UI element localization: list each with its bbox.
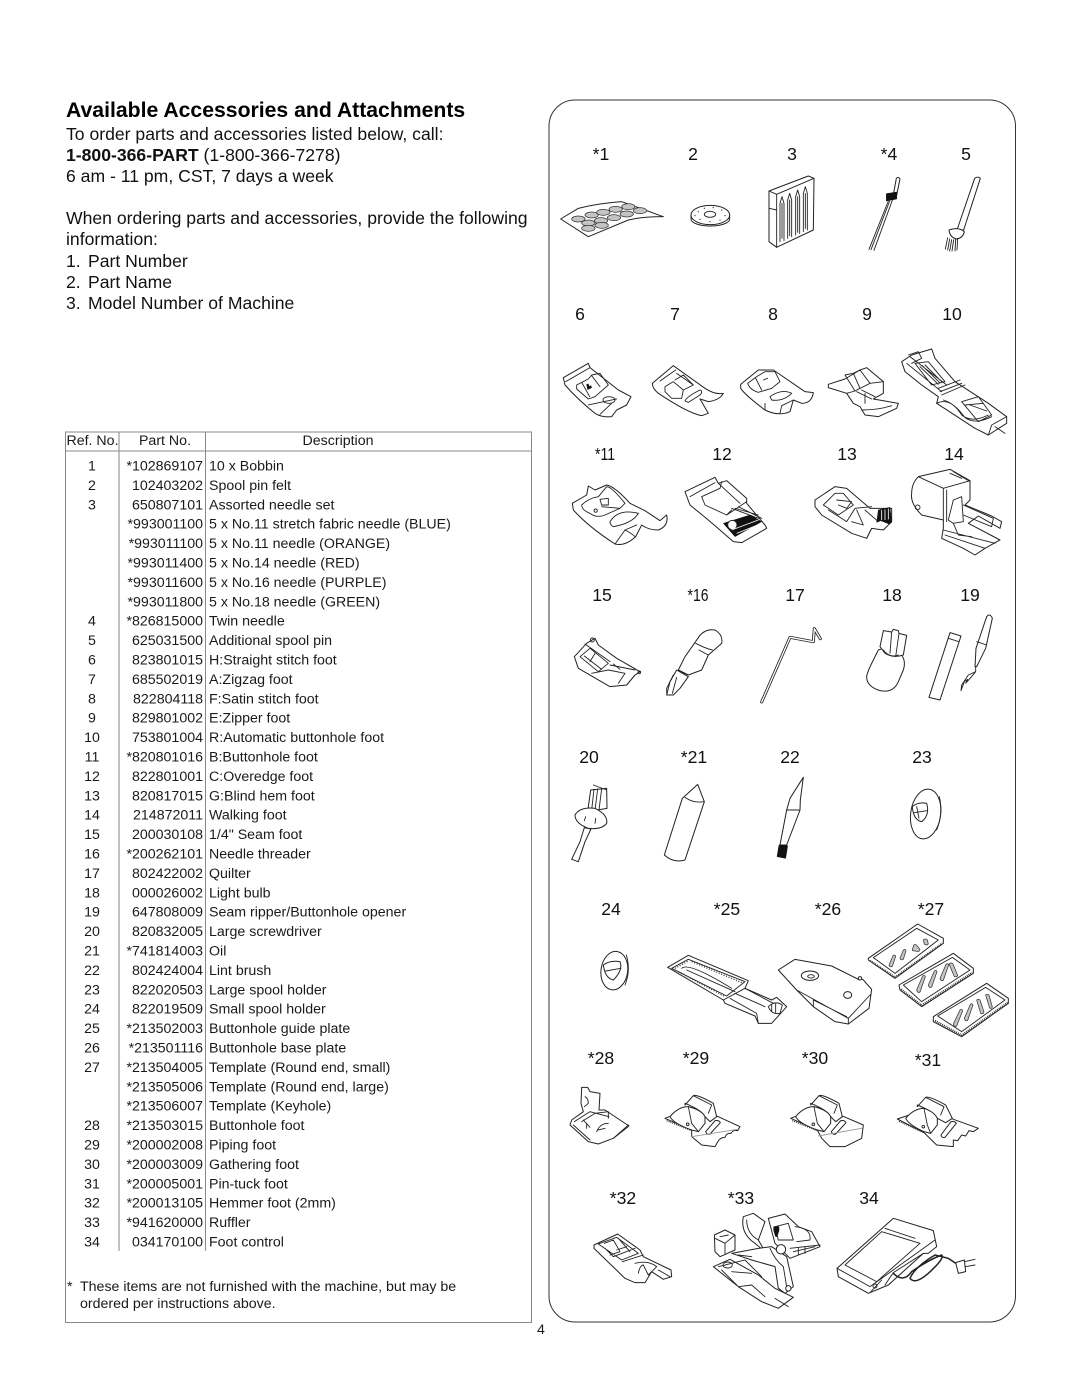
table rows: Oil bbox=[209, 944, 226, 960]
table rows: Piping foot bbox=[209, 1138, 276, 1154]
table rows: 19 bbox=[84, 905, 100, 921]
table rows: 1 bbox=[88, 458, 96, 474]
table rows: 3 bbox=[88, 497, 96, 513]
ordering information text: 3. bbox=[66, 293, 81, 313]
ordering information text bbox=[66, 208, 528, 313]
table rows: 820832005 bbox=[132, 924, 203, 940]
table rows: 7 bbox=[88, 672, 96, 688]
table rows: *200013105 bbox=[126, 1196, 203, 1212]
table rows: 32 bbox=[84, 1196, 100, 1212]
ordering information text: When ordering parts and accessories, provide the following bbox=[66, 208, 528, 228]
icon: large spool holder bbox=[907, 787, 944, 841]
table rows: *200003009 bbox=[126, 1157, 203, 1173]
table rows: Lint brush bbox=[209, 963, 271, 979]
icon: lint brush bbox=[777, 777, 803, 858]
table rows: 5 x No.11 stretch fabric needle (BLUE) bbox=[209, 517, 451, 533]
item numbers: *1 bbox=[593, 144, 609, 164]
table rows: Small spool holder bbox=[209, 1002, 326, 1018]
item numbers: 12 bbox=[712, 444, 732, 464]
table rows: Template (Round end, large) bbox=[209, 1079, 389, 1095]
item numbers: 8 bbox=[768, 304, 778, 324]
illustrations rows 6-8 bbox=[570, 924, 1008, 1308]
icon: pin-tuck foot bbox=[897, 1097, 978, 1147]
table rows: 20 bbox=[84, 924, 100, 940]
table rows: 034170100 bbox=[132, 1234, 203, 1250]
icon: ruffler bbox=[713, 1213, 820, 1308]
table rows: 6 bbox=[88, 652, 96, 668]
table rows: Large spool holder bbox=[209, 982, 327, 998]
table rows: 1/4" Seam foot bbox=[209, 827, 302, 843]
table rows: B:Buttonhole foot bbox=[209, 750, 318, 766]
table rows: 829801002 bbox=[132, 711, 203, 727]
icon: additional spool pin bbox=[945, 177, 980, 251]
ordering contact text: 6 am - 11 pm, CST, 7 days a week bbox=[66, 166, 334, 186]
icon: buttonhole base plate bbox=[778, 959, 872, 1024]
table rows: Hemmer foot (2mm) bbox=[209, 1196, 336, 1212]
icon: small spool holder bbox=[598, 950, 630, 992]
table rows: 24 bbox=[84, 1002, 100, 1018]
table rows: R:Automatic buttonhole foot bbox=[209, 730, 384, 746]
icon: zigzag foot bbox=[652, 366, 723, 416]
table rows: 647808009 bbox=[132, 905, 203, 921]
table rows: C:Overedge foot bbox=[209, 769, 313, 785]
table rows: 822804118 bbox=[133, 691, 203, 707]
table rows: F:Satin stitch foot bbox=[209, 691, 319, 707]
illustrations rows 3-5 bbox=[572, 469, 1002, 862]
table rows: Light bulb bbox=[209, 885, 271, 901]
table rows: Twin needle bbox=[209, 614, 285, 630]
item numbers: 10 bbox=[942, 304, 962, 324]
item numbers: 7 bbox=[670, 304, 680, 324]
item numbers: 5 bbox=[961, 144, 971, 164]
table rows: 5 x No.16 needle (PURPLE) bbox=[209, 575, 386, 591]
ordering information text: Model Number of Machine bbox=[88, 293, 294, 313]
item numbers: *28 bbox=[588, 1048, 614, 1068]
table rows: Buttonhole guide plate bbox=[209, 1021, 350, 1037]
table rows: Buttonhole base plate bbox=[209, 1040, 346, 1056]
item numbers: 20 bbox=[579, 747, 599, 767]
table rows bbox=[84, 458, 451, 1250]
item numbers: 19 bbox=[960, 585, 980, 605]
table rows: 29 bbox=[84, 1138, 100, 1154]
item numbers: *21 bbox=[681, 747, 707, 767]
table rows: *200002008 bbox=[126, 1138, 203, 1154]
table rows: *993001100 bbox=[128, 517, 203, 533]
table rows: *213504005 bbox=[126, 1060, 203, 1076]
item numbers: 23 bbox=[912, 747, 932, 767]
table rows: Quilter bbox=[209, 866, 251, 882]
table rows: *820801016 bbox=[126, 750, 203, 766]
table rows: 820817015 bbox=[132, 788, 203, 804]
icon: walking foot bbox=[911, 469, 1002, 555]
item numbers: 3 bbox=[787, 144, 797, 164]
table rows: *213501116 bbox=[129, 1040, 203, 1056]
table rows: 2 bbox=[88, 478, 96, 494]
table rows: 625031500 bbox=[132, 633, 203, 649]
table rows: Template (Round end, small) bbox=[209, 1060, 390, 1076]
table rows: *213502003 bbox=[126, 1021, 203, 1037]
icon: needle threader bbox=[667, 630, 722, 695]
table rows: *993011100 bbox=[129, 536, 203, 552]
table rows: 12 bbox=[84, 769, 100, 785]
table rows: 28 bbox=[84, 1118, 100, 1134]
table rows: 8 bbox=[88, 691, 96, 707]
item numbers: 24 bbox=[601, 899, 621, 919]
ordering information text: Part Number bbox=[88, 251, 188, 271]
table rows: 000026002 bbox=[132, 885, 203, 901]
table rows: *213505006 bbox=[126, 1079, 203, 1095]
table rows: 21 bbox=[84, 944, 100, 960]
item numbers: *25 bbox=[714, 899, 740, 919]
table header: Ref. No. bbox=[66, 433, 119, 449]
ordering information text: 1. bbox=[66, 251, 81, 271]
footnote bbox=[67, 1279, 456, 1312]
item numbers: *30 bbox=[802, 1048, 828, 1068]
table rows: *200262101 bbox=[126, 846, 203, 862]
icon: straight stitch foot bbox=[563, 363, 631, 417]
table rows: 9 bbox=[88, 711, 96, 727]
table rows: 802424004 bbox=[132, 963, 203, 979]
ordering information text: information: bbox=[66, 229, 158, 249]
table rows: 16 bbox=[84, 846, 100, 862]
table rows: 822019509 bbox=[132, 1002, 203, 1018]
table rows: 26 bbox=[84, 1040, 100, 1056]
table rows: 11 bbox=[85, 750, 99, 766]
table rows: *826815000 bbox=[126, 614, 203, 630]
table rows: *200005001 bbox=[126, 1176, 203, 1192]
item numbers: 15 bbox=[592, 585, 612, 605]
table rows: 685502019 bbox=[132, 672, 203, 688]
icon: light bulb bbox=[867, 629, 907, 691]
table rows: Walking foot bbox=[209, 808, 287, 824]
icon: template plates bbox=[868, 924, 1008, 1037]
table rows: Assorted needle set bbox=[209, 497, 334, 513]
ordering contact text: To order parts and accessories listed below, call: bbox=[66, 124, 443, 144]
icon: blind hem foot bbox=[815, 487, 892, 538]
table rows: *741814003 bbox=[126, 944, 203, 960]
table rows: 5 x No.18 needle (GREEN) bbox=[209, 594, 380, 610]
icon: large screwdriver bbox=[572, 785, 607, 862]
icon: assorted needle set bbox=[769, 176, 814, 247]
table rows: H:Straight stitch foot bbox=[209, 652, 337, 668]
footnote: * bbox=[67, 1279, 73, 1295]
item numbers: 6 bbox=[575, 304, 585, 324]
table rows: *993011800 bbox=[128, 594, 203, 610]
icon: buttonhole foot 28 bbox=[570, 1087, 629, 1144]
table rows: E:Zipper foot bbox=[209, 711, 290, 727]
table rows: Spool pin felt bbox=[209, 478, 291, 494]
icon: quilter bbox=[762, 629, 820, 702]
table rows: Needle threader bbox=[209, 846, 311, 862]
panel: accessories illustrations bbox=[549, 100, 1016, 1322]
table rows: A:Zigzag foot bbox=[209, 672, 293, 688]
icon: twin needle bbox=[869, 177, 900, 250]
table rows: Pin-tuck foot bbox=[209, 1176, 288, 1192]
icon: buttonhole foot bbox=[572, 485, 667, 545]
table rows: 214872011 bbox=[133, 808, 203, 824]
table rows: 13 bbox=[84, 788, 100, 804]
item numbers: 2 bbox=[688, 144, 698, 164]
item numbers: *4 bbox=[881, 144, 898, 164]
table rows: 22 bbox=[84, 963, 100, 979]
item numbers: *11 bbox=[595, 444, 615, 464]
table rows: G:Blind hem foot bbox=[209, 788, 315, 804]
item numbers: 34 bbox=[859, 1188, 879, 1208]
icon: gathering foot bbox=[791, 1095, 863, 1147]
table rows: 34 bbox=[84, 1234, 100, 1250]
table rows: Foot control bbox=[209, 1234, 284, 1250]
item numbers: *32 bbox=[610, 1188, 636, 1208]
item numbers: *33 bbox=[728, 1188, 754, 1208]
ordering contact text bbox=[66, 124, 443, 186]
icon: oil bottle bbox=[664, 784, 704, 861]
table rows: 200030108 bbox=[132, 827, 203, 843]
page number: 4 bbox=[537, 1322, 545, 1338]
table header: Description bbox=[303, 433, 373, 449]
table rows: 31 bbox=[84, 1176, 100, 1192]
footnote: ordered per instructions above. bbox=[80, 1296, 276, 1312]
item numbers: *27 bbox=[918, 899, 944, 919]
ordering information text: Part Name bbox=[88, 272, 172, 292]
icon: buttonhole guide plate bbox=[668, 955, 787, 1023]
icon: seam foot bbox=[574, 638, 641, 687]
table header bbox=[66, 433, 373, 449]
item numbers: *31 bbox=[915, 1050, 941, 1070]
panel: parts table bbox=[66, 432, 532, 1322]
table rows: Template (Keyhole) bbox=[209, 1099, 331, 1115]
table rows: 23 bbox=[84, 982, 100, 998]
item numbers: 18 bbox=[882, 585, 902, 605]
table rows: *102869107 bbox=[126, 458, 203, 474]
table rows: 10 x Bobbin bbox=[209, 458, 284, 474]
illustrations rows 1-2 bbox=[561, 176, 1007, 435]
icon: overedge foot bbox=[685, 477, 767, 543]
table rows: Additional spool pin bbox=[209, 633, 332, 649]
table rows: 33 bbox=[84, 1215, 100, 1231]
item numbers: *26 bbox=[815, 899, 841, 919]
table rows: 5 bbox=[88, 633, 96, 649]
table rows: Gathering foot bbox=[209, 1157, 299, 1173]
item numbers: 17 bbox=[785, 585, 805, 605]
icon: foot control bbox=[837, 1218, 975, 1293]
table rows: *993011600 bbox=[128, 575, 203, 591]
item numbers: *16 bbox=[688, 585, 709, 605]
table rows: 822020503 bbox=[132, 982, 203, 998]
icon: bobbins bbox=[561, 202, 663, 237]
table rows: Ruffler bbox=[209, 1215, 251, 1231]
table rows: 17 bbox=[84, 866, 100, 882]
table rows: *941620000 bbox=[126, 1215, 203, 1231]
title: Available Accessories and Attachments bbox=[66, 99, 465, 122]
item numbers bbox=[575, 144, 980, 1208]
table rows: 10 bbox=[84, 730, 100, 746]
table rows: *213503015 bbox=[126, 1118, 203, 1134]
table rows: 650807101 bbox=[132, 497, 203, 513]
ordering contact text: 1-800-366-PART (1-800-366-7278) bbox=[66, 145, 340, 165]
table rows: Seam ripper/Buttonhole opener bbox=[209, 905, 406, 921]
icon: automatic buttonhole foot bbox=[902, 349, 1007, 435]
icon: seam ripper bbox=[929, 615, 992, 700]
table rows: Buttonhole foot bbox=[209, 1118, 305, 1134]
table rows: 18 bbox=[84, 885, 100, 901]
icon: spool pin felt bbox=[691, 205, 730, 226]
table rows: 823801015 bbox=[132, 652, 203, 668]
table rows: *213506007 bbox=[126, 1099, 203, 1115]
icon: piping foot bbox=[665, 1095, 740, 1147]
icon: satin stitch foot bbox=[741, 370, 813, 414]
item numbers: *29 bbox=[683, 1048, 709, 1068]
item numbers: 14 bbox=[944, 444, 964, 464]
table rows: 5 x No.14 needle (RED) bbox=[209, 556, 360, 572]
item numbers: 13 bbox=[837, 444, 857, 464]
footnote: These items are not furnished with the machine, but may be bbox=[80, 1279, 456, 1295]
table rows: 4 bbox=[88, 614, 96, 630]
table rows: Large screwdriver bbox=[209, 924, 322, 940]
table rows: 802422002 bbox=[132, 866, 203, 882]
icon: zipper foot bbox=[828, 368, 898, 417]
item numbers: 22 bbox=[780, 747, 800, 767]
ordering information text: 2. bbox=[66, 272, 81, 292]
table header: Part No. bbox=[139, 433, 191, 449]
table rows: *993011400 bbox=[128, 556, 203, 572]
icon: hemmer foot bbox=[594, 1234, 672, 1283]
table rows: 14 bbox=[84, 808, 100, 824]
table rows: 102403202 bbox=[132, 478, 203, 494]
table rows: 27 bbox=[84, 1060, 100, 1076]
table rows: 5 x No.11 needle (ORANGE) bbox=[209, 536, 390, 552]
table rows: 25 bbox=[84, 1021, 100, 1037]
table rows: 822801001 bbox=[132, 769, 203, 785]
table rows: 753801004 bbox=[132, 730, 203, 746]
table rows: 30 bbox=[84, 1157, 100, 1173]
table rows: 15 bbox=[84, 827, 100, 843]
item numbers: 9 bbox=[862, 304, 872, 324]
